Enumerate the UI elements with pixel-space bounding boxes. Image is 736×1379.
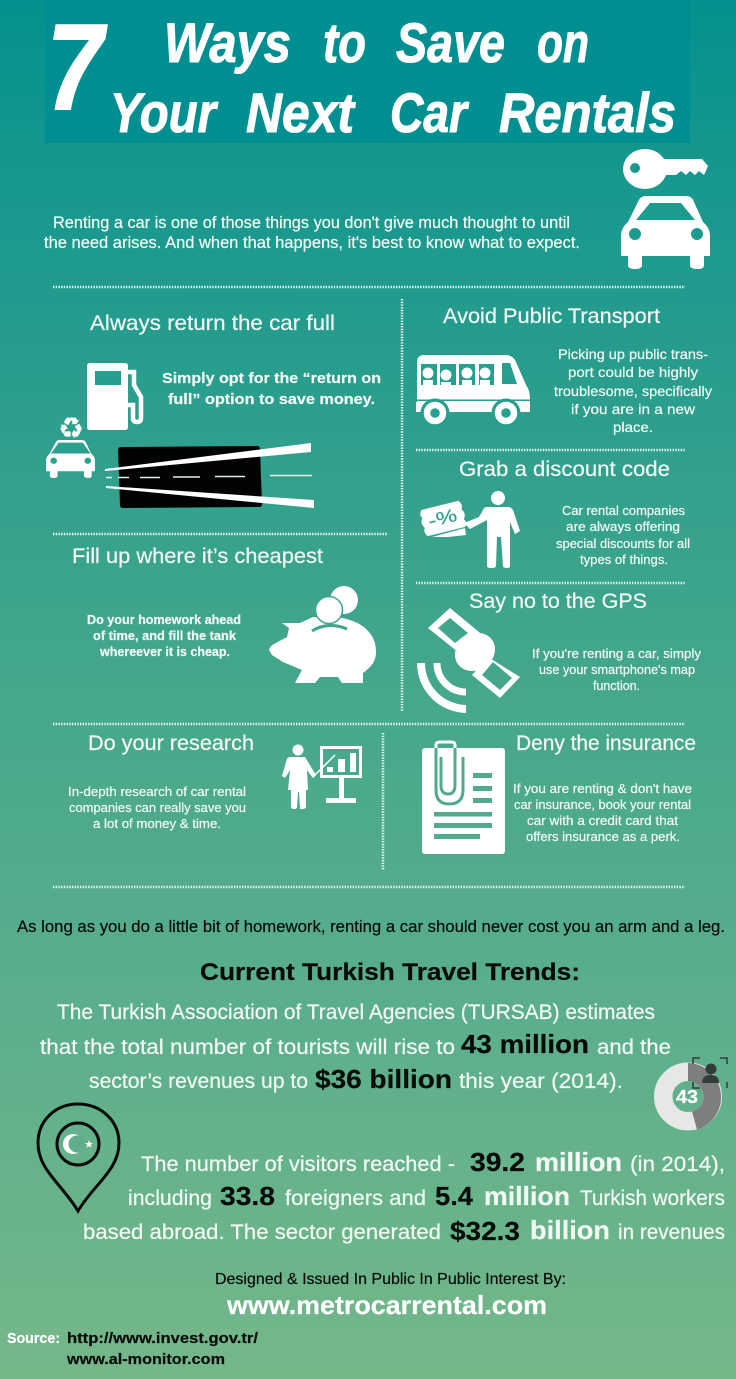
heading: always return: Always return the car full [90, 311, 335, 335]
icon: piggy bank [269, 586, 376, 683]
text: number of visitors: 39.2 [470, 1147, 525, 1177]
panel: do your research [68, 731, 360, 831]
text: picking up: if you are in a new [571, 401, 696, 417]
text: car rental companies: are always offering [566, 520, 680, 534]
panel: fill up where it's cheapest [72, 544, 376, 683]
text: if you are renting: car insurance, book your rental [514, 798, 691, 812]
text: smartphone map: use your smartphone's map [539, 663, 695, 677]
text: picking up: Picking up public trans- [558, 346, 708, 362]
icon: satellite [421, 608, 520, 709]
heading: deny the insurance: Deny the insurance [516, 731, 696, 755]
icon: recycle symbol: ♻ [58, 411, 84, 445]
credit line: Designed & Issued In Public In Public Interest By: [215, 1271, 566, 1288]
text: number of visitors: 33.8 [220, 1181, 275, 1211]
text: picking up: place. [613, 419, 653, 435]
text: number of visitors: (in 2014), [630, 1153, 725, 1176]
text: do your homework: of time, and fill the tank [93, 629, 236, 643]
text: TURSAB estimates [40, 1001, 671, 1094]
text: number of visitors: foreigners and [285, 1187, 426, 1210]
text: in-depth research: a lot of money & time. [93, 817, 221, 831]
title banner: Car [390, 81, 470, 144]
website: www.metrocarrental.com [226, 1290, 547, 1320]
title banner: Ways [164, 11, 291, 74]
text: TURSAB estimates: that the total number of tourists will rise to [40, 1036, 455, 1059]
title banner: Save [396, 11, 505, 74]
heading: current Turkish travel trends: Current Turkish Travel Trends: [200, 959, 580, 986]
title banner: to [323, 11, 366, 74]
title banner: Your [110, 81, 219, 144]
icon: map pin with Turkish flag [38, 1104, 119, 1211]
intro text: the need arises. And when that happens, it's best to know what to expect. [44, 234, 580, 252]
text: if you are renting: If you are renting & don't have [513, 782, 692, 796]
title banner: 7 [47, 0, 107, 135]
panel: say no to the GPS [421, 589, 702, 709]
text: in-depth research: companies can really save you [69, 801, 246, 815]
heading: say no to the GPS: Say no to the GPS [469, 589, 647, 613]
text: if you are renting: car with a credit card that [527, 814, 679, 828]
text: number of visitors: in revenues [618, 1221, 725, 1244]
panel: deny the insurance [422, 731, 696, 854]
text: car rental companies [556, 504, 690, 567]
text: smartphone map: If you're renting a car, simply [532, 647, 702, 661]
text: number of visitors: The number of visitors reached - [141, 1153, 455, 1176]
text: number of visitors: billion [530, 1215, 610, 1245]
text: number of visitors: $32.3 [450, 1216, 520, 1246]
heading: avoid public transport: Avoid Public Transport [443, 304, 660, 328]
text: if you are renting [513, 782, 692, 844]
icon: presenter with chart [282, 744, 360, 809]
icon: bus [416, 355, 530, 428]
text: number of visitors: Turkish workers [580, 1187, 725, 1210]
text: number of visitors: including [128, 1187, 212, 1210]
title banner: Rentals [499, 81, 676, 144]
icon: person frame [693, 1058, 727, 1088]
title banner: on [537, 11, 589, 74]
icon: man with discount ticket [419, 491, 520, 568]
panel: always return the car full [46, 311, 381, 508]
text: picking up: port could be highly [568, 364, 698, 380]
heading: grab a discount code: Grab a discount code [459, 457, 670, 481]
text: picking up [554, 346, 712, 435]
intro text: Renting a car is one of those things you don't give much thought to until [53, 214, 570, 232]
text: TURSAB estimates: this year (2014). [459, 1070, 623, 1093]
icon: small car [46, 440, 95, 478]
closing statement: As long as you do a little bit of homework, renting a car should never cost you an arm and a leg. [17, 917, 725, 936]
text: TURSAB estimates: 43 million [461, 1029, 589, 1059]
text: picking up: troublesome, specifically [554, 383, 712, 399]
text: do your homework [87, 613, 241, 659]
title banner: Next [246, 81, 356, 144]
text: TURSAB estimates: sector’s revenues up to [89, 1070, 308, 1093]
panel: avoid public transport [416, 304, 712, 435]
text: TURSAB estimates: $36 billion [315, 1064, 452, 1094]
text: return on full: Simply opt for the “return on [162, 370, 381, 387]
sources: Source: [7, 1330, 60, 1347]
heading: do your research: Do your research [88, 731, 254, 755]
text: return on full [162, 370, 381, 408]
text: number of visitors [83, 1147, 725, 1246]
text: number of visitors: million [484, 1181, 570, 1211]
icon: fuel pump [87, 363, 141, 430]
heading: fill up: Fill up where it’s cheapest [72, 544, 323, 568]
icon: clipboard [422, 742, 505, 854]
text: TURSAB estimates: and the [597, 1036, 671, 1059]
text: TURSAB estimates: The Turkish Association of Travel Agencies (TURSAB) estimates [57, 1001, 655, 1024]
icon: key [623, 149, 708, 189]
chart: donut 43 [663, 1058, 727, 1130]
icon: car [621, 196, 710, 269]
sources: http://www.invest.gov.tr/ [67, 1330, 259, 1347]
chart: donut 43: 43 [676, 1087, 698, 1107]
text: car rental companies: special discounts for all [556, 537, 690, 551]
panel: grab a discount code [419, 457, 690, 568]
text: do your homework: whereever it is cheap. [99, 645, 230, 659]
text: car rental companies: Car rental companies [562, 504, 685, 518]
title banner [45, 0, 690, 144]
text: number of visitors: based abroad. The sector generated [83, 1221, 441, 1244]
text: smartphone map [532, 647, 702, 693]
text: car rental companies: types of things. [580, 553, 668, 567]
text: in-depth research: In-depth research of car rental [68, 785, 246, 799]
text: do your homework: Do your homework ahead [87, 613, 241, 627]
text: in-depth research [68, 785, 246, 831]
illustration: road [105, 443, 314, 508]
sources: www.al-monitor.com [66, 1351, 225, 1368]
text: number of visitors: 5.4 [435, 1181, 474, 1211]
icon: man with discount ticket: -% [426, 505, 459, 531]
sources [7, 1330, 259, 1368]
text: if you are renting: offers insurance as a perk. [526, 830, 680, 844]
text: number of visitors: million [535, 1147, 622, 1177]
text: return on full: full” option to save money. [168, 391, 375, 408]
text: smartphone map: function. [593, 679, 640, 693]
intro text [44, 214, 580, 252]
